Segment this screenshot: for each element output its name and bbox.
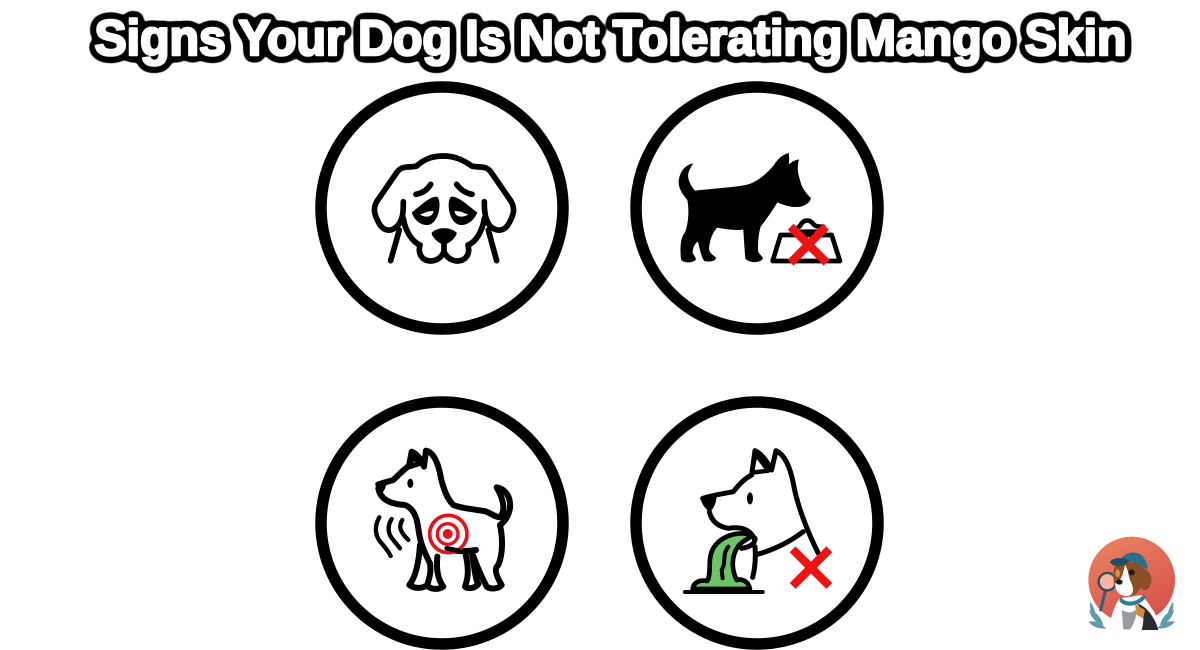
magnifier [1101,588,1106,610]
icon: red cross [791,227,827,263]
icon: vomiting dog [685,451,829,592]
icon: dog outline [375,451,510,589]
body [1110,595,1158,630]
icon: dog silhouette [679,153,840,263]
panel: loss of appetite [636,87,878,329]
collar [1119,594,1145,606]
panel: sad, lethargic dog [321,87,563,329]
panel: abdominal pain [321,402,563,644]
icon: sad dog face [374,156,514,261]
icon: food bowl [773,221,840,261]
panel: vomiting [636,402,878,644]
title: Signs Your Dog Is Not Tolerating Mango Skin [94,10,1126,66]
leaves [1088,602,1175,629]
cap [1120,553,1147,570]
icon: red target on belly [430,515,467,553]
head [1113,562,1152,596]
icon: red cross [793,549,829,586]
logo: beagle detective [1088,537,1175,630]
